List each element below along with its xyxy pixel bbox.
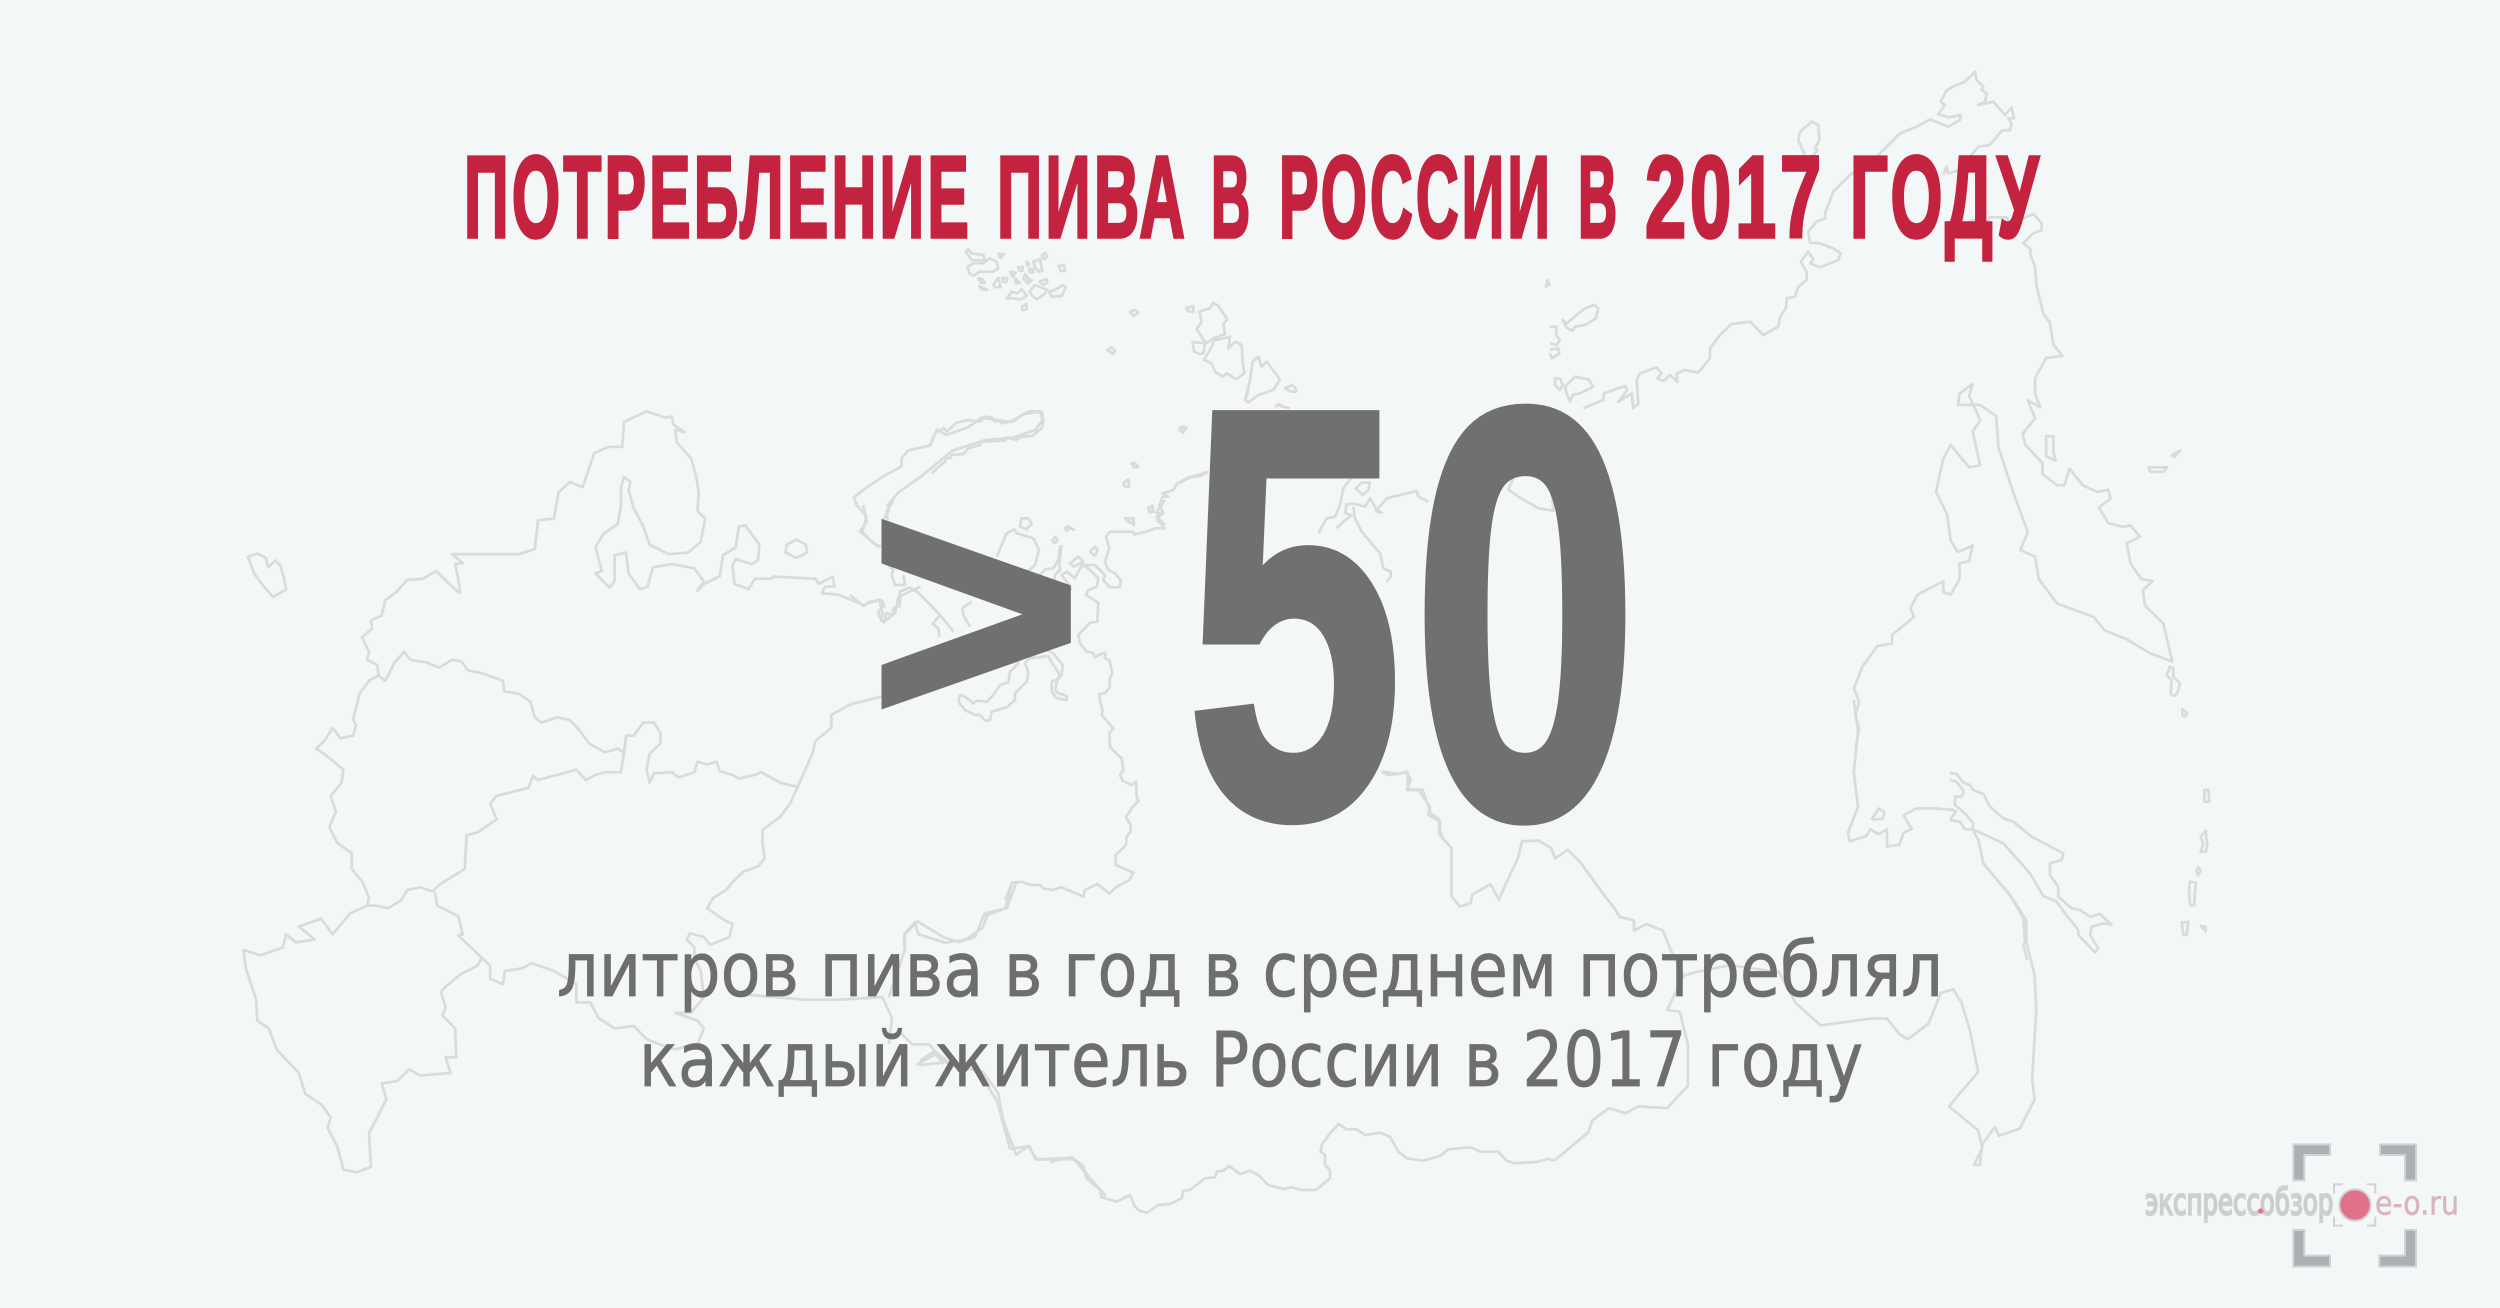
big number: more than 50: 5 [1186, 289, 1403, 938]
logo dot [2258, 1208, 2263, 1214]
title: ПОТРЕБЛЕНИЕ [464, 132, 972, 262]
title [464, 132, 2042, 262]
title: ГОДУ [1850, 132, 2042, 262]
map of Russia outline [243, 72, 2209, 1213]
title: РОССИИ [1279, 132, 1553, 262]
logo frame corners [2293, 1144, 2416, 1267]
big number: more than 50: 0 [1412, 289, 1639, 939]
title: 2017 [1645, 132, 1825, 262]
caption text: литров пива в год в среднем потреблял [557, 925, 1943, 1014]
title: В [1578, 132, 1620, 262]
logo domain: e-o.ru [2375, 1183, 2459, 1222]
title: В [1211, 132, 1253, 262]
caption text [557, 925, 1943, 1104]
title: ПИВА [997, 132, 1188, 262]
caption text: каждый житель России в 2017 году [639, 1015, 1863, 1104]
big number: more than 50: > [870, 423, 1082, 797]
big number: more than 50 [870, 289, 1639, 939]
logo circle [2339, 1189, 2371, 1221]
logo: expressobzor e-o.ru [2145, 1144, 2459, 1267]
logo small brackets [2334, 1184, 2375, 1226]
logo wordmark: экспрессобзор [2145, 1180, 2333, 1223]
